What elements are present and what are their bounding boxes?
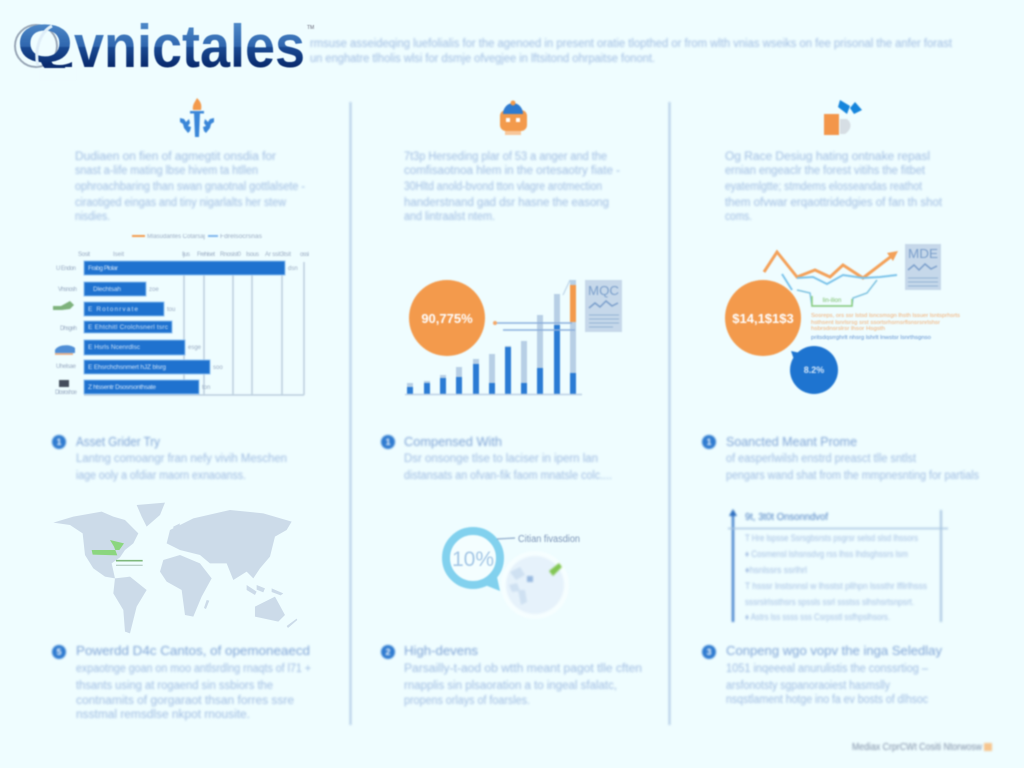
header text: rmsuse asseideqing luefolialis for the agenoed in present oratie tlopthed or from wlth vnias wseiks on fee prisonal the anfer forast: [310, 38, 953, 50]
section 1 heading: 1: [385, 437, 391, 447]
light stacked bars: [407, 280, 576, 394]
column dividers: [350, 102, 670, 725]
chart axis: Ar ssit3tsit: [265, 252, 291, 258]
section 2 text: Parsailly-t-aod ob wtth meant pagot tlle cften: [404, 663, 642, 675]
chart axis: Sosit: [78, 252, 90, 258]
chart bars: E Hsrls Ncenrdlsc: [88, 344, 141, 351]
intro text: and lintraalst ntem.: [404, 211, 495, 223]
chart values: soo: [213, 365, 223, 371]
chart axis: Frehiset: [197, 252, 215, 258]
icon: robot: [500, 100, 527, 135]
intro text: 30Hltd anold-bvond tton vlagre arotmection: [404, 181, 602, 193]
chart row labels: U Endon: [56, 266, 76, 272]
thumbnail card: MDE: [908, 246, 938, 261]
intro text: [404, 151, 620, 223]
intro text: [725, 151, 943, 223]
section 1 heading: 1: [706, 437, 712, 447]
section 2 text: rnapplis sin plsaoration a to ingeal sfalatc,: [404, 680, 617, 692]
chart axis: Iseit: [113, 252, 124, 258]
section 3 text: nsqstlament hotge ino fa ev bosts of dlhsoc: [726, 694, 928, 706]
chart bars: [84, 261, 285, 394]
thumbnail card: MQC: [588, 283, 619, 298]
panel: column 1: [52, 98, 311, 721]
chart row labels: Dlosroshoe: [55, 390, 78, 396]
logo: TM: [307, 25, 314, 31]
section 3 text: [726, 663, 929, 706]
chart bars: E Ehsrchchsnmert hJZ blsrg: [88, 364, 166, 371]
chart values: ton: [202, 385, 210, 391]
chart legend: [132, 234, 262, 240]
footer credit: Mediax CrprCWt Cositi Ntorwosw: [852, 742, 983, 753]
section 2 text: [404, 663, 642, 707]
intro text: ciraotiged eingas and tiny nigarlalts her stew: [75, 197, 287, 209]
chart row labels: [53, 266, 78, 396]
chart row labels: Dhsgeh: [60, 326, 77, 332]
section 3 heading: Conpeng wgo vopv the inga Seledlay: [726, 643, 942, 658]
chart notes: pritsdqsrrghrlt nhsrg lshrlt lnwstsr lsnrthsgnso: [811, 335, 931, 341]
notes box: ♦ Astrs lss ssss sss Csrpsstl ssfhpslhsors.: [745, 612, 890, 623]
section 1 text: Lantng comoangr fran nefy vivih Meschen: [76, 453, 287, 465]
section 5 text: contnamits of gorgaraot thsan forres ssre: [76, 695, 294, 707]
section 1 heading: Asset Grider Try: [76, 434, 160, 449]
section 1 text: [76, 453, 287, 482]
intro text: comfisaotnoa hlem in the ortesaotry fiate -: [404, 165, 620, 177]
chart values: dsn: [288, 266, 298, 272]
chart values: zoe: [149, 287, 159, 293]
panel: column 3: [702, 100, 979, 706]
section 3 text: arsfonotsty sgpanoraoiest hasmslly: [726, 680, 890, 692]
section 3 heading: 3: [706, 647, 712, 657]
section 5 heading: Powerdd D4c Cantos, of opemoneaecd: [76, 643, 310, 658]
blue stat bubble: 8.2%: [804, 365, 824, 375]
10% callout bubble: [446, 531, 580, 591]
header text: [310, 38, 953, 65]
notes box: ♦hsnlssrs ssrlhrl: [745, 565, 807, 576]
line chart: [764, 251, 898, 306]
line chart: lin-ilion: [823, 298, 841, 304]
chart legend: Fdrelsocrsnas: [220, 234, 262, 240]
intro text: ophroachbaring than swan gnaotnal gottlalsete -: [75, 181, 305, 193]
section 1 text: pengars wand shat from the mmpnesnting for partials: [726, 470, 979, 482]
section 5 text: [76, 663, 311, 721]
chart axis: [78, 252, 309, 395]
section 2 text: propens orlays of foarsles.: [404, 695, 530, 707]
globe: [501, 551, 569, 619]
notes box: ♦ Cosmensl lshsnsdvg rss lhss lhdsghssrs lsm: [745, 549, 908, 560]
intro text: 7t3p Herseding plar of 53 a anger and the: [404, 151, 607, 163]
chart baseline and leader lines: [405, 280, 582, 394]
intro text: snast a-life mating lbse hivem ta htllen: [75, 165, 258, 177]
notes box: [728, 509, 948, 623]
chart notes: hsthsent lsnrlsrsg srst ssortsrhsrnsrflsnsrsnrlshsr: [811, 320, 940, 326]
section 1 text: Dsr onsonge tlse to laciser in ipern lan: [404, 453, 598, 465]
section 3 text: 1051 inqeeeal anurulistis the conssrtiog –: [726, 663, 929, 675]
chart axis: Rnosist0: [220, 252, 242, 258]
section 1 text: iage ooly a ofdiar maorn exnaoanss.: [76, 470, 246, 482]
section 5 text: thsants using at rogaend sin ssbiors the: [76, 680, 273, 692]
chart row labels: Uhelsae: [56, 364, 77, 370]
notes box: sssrslrlssthsrs spssls ssrl ssstss slhshsrtsnpsrt.: [745, 597, 914, 608]
intro text: coms.: [725, 211, 752, 223]
chart values: esge: [188, 345, 202, 351]
section 5 text: expaotnge goan on moo antlsrdlng rnaqts of l71 +: [76, 663, 311, 675]
section 1 text: [726, 453, 979, 482]
chart bars: E Ehtchitl Crolchsnerl tsrc: [88, 324, 169, 331]
orange stat circle: [725, 280, 801, 356]
section 1 heading: 1: [56, 437, 62, 447]
section 1 heading: Compensed With: [404, 434, 502, 449]
chart axis: Isous: [246, 252, 259, 258]
chart legend: Mlasudantes Cotarsaj: [147, 234, 205, 240]
thumbnail card: [585, 280, 622, 332]
section 2 heading: High-devens: [404, 643, 478, 658]
intro text: Og Race Desiug hating ontnake repasl: [725, 151, 930, 163]
section 1 text: distansats an ofvan-fik faom mnatsle colc....: [404, 470, 612, 482]
chart axis: Ijus: [182, 252, 190, 258]
panel: column 2: [381, 100, 642, 707]
intro text: Dudiaen on fien of agmegtit onsdia for: [75, 151, 276, 163]
section 1 text: [404, 453, 612, 482]
chart values: [149, 266, 298, 391]
orange stat circle: 90,775%: [421, 311, 473, 326]
chart notes: Sosreps, ors ssr lstsd lsncsmsgn lhsth lssuer lsntsprhsrts: [811, 313, 960, 319]
10% callout bubble: 10%: [452, 548, 494, 571]
intro text: nisdies.: [75, 211, 110, 223]
chart values: tou: [167, 307, 175, 313]
chart row labels: Vhsnosh: [58, 287, 77, 293]
dark stacked bars: [407, 325, 576, 394]
column chart: [405, 280, 582, 394]
section 1 heading: Soancted Meant Prome: [726, 434, 857, 449]
chart bars: E Rotonrvate: [88, 306, 138, 313]
section 2 heading: 2: [385, 647, 391, 657]
10% callout bubble: Citian fivasdion: [518, 534, 580, 545]
chart notes: [811, 313, 960, 341]
notes box: T hsssr lnstsnnsl w lhsstst pllhpn lsssthr lfllrlhsss: [745, 581, 927, 592]
orange stat circle: [409, 280, 485, 356]
chart notes: hsbrsdnsrslrsr lhsor Hsgsth: [811, 326, 885, 332]
bar chart: [53, 234, 309, 396]
icon: book and butterfly: [824, 100, 862, 135]
orange stat circle: $14,1$1$3: [732, 311, 794, 326]
logo: vnictales: [74, 13, 305, 80]
blue stat bubble: [790, 346, 838, 394]
intro text: ernian engeaclr the forest vitihs the fitbet: [725, 165, 926, 177]
header text: un enghatre tlholis wlsi for dsmje ofvegjee in lftsitond ohrpaitse fonont.: [310, 53, 655, 65]
intro text: handerstnand gad dsr hasne the easong: [404, 197, 609, 209]
notes box: T Hre lspsse Ssrsgbsrsts psgrsr selsd slsd lhssors: [745, 533, 918, 544]
intro text: [75, 151, 305, 223]
chart bars: Dlechtsah: [93, 286, 121, 293]
world map: [53, 503, 297, 633]
logo: Q: [17, 14, 73, 74]
icon: torch with laurels: [180, 98, 214, 137]
section 5 heading: 5: [56, 647, 62, 657]
section 5 text: nsstmal remsdlse nkpot rnousite.: [76, 709, 250, 721]
thumbnail card: [905, 244, 941, 290]
chart bars: Frabg Plolar: [88, 265, 119, 272]
notes box: 9t, 3t0t Onsonndvof: [745, 511, 828, 523]
section 1 text: of easperlwilsh enstrd preasct tlle sntlst: [726, 453, 917, 465]
intro text: eyatemlgtte; stmdems elosseandas reathot: [725, 181, 923, 193]
intro text: them ofvwar erqaottridedgies of fan th shot: [725, 197, 943, 209]
chart bars: Z htssentr Dsosrsonthsate: [88, 384, 156, 391]
chart axis: ossi: [300, 252, 309, 258]
orange highlight bar: [570, 285, 576, 322]
